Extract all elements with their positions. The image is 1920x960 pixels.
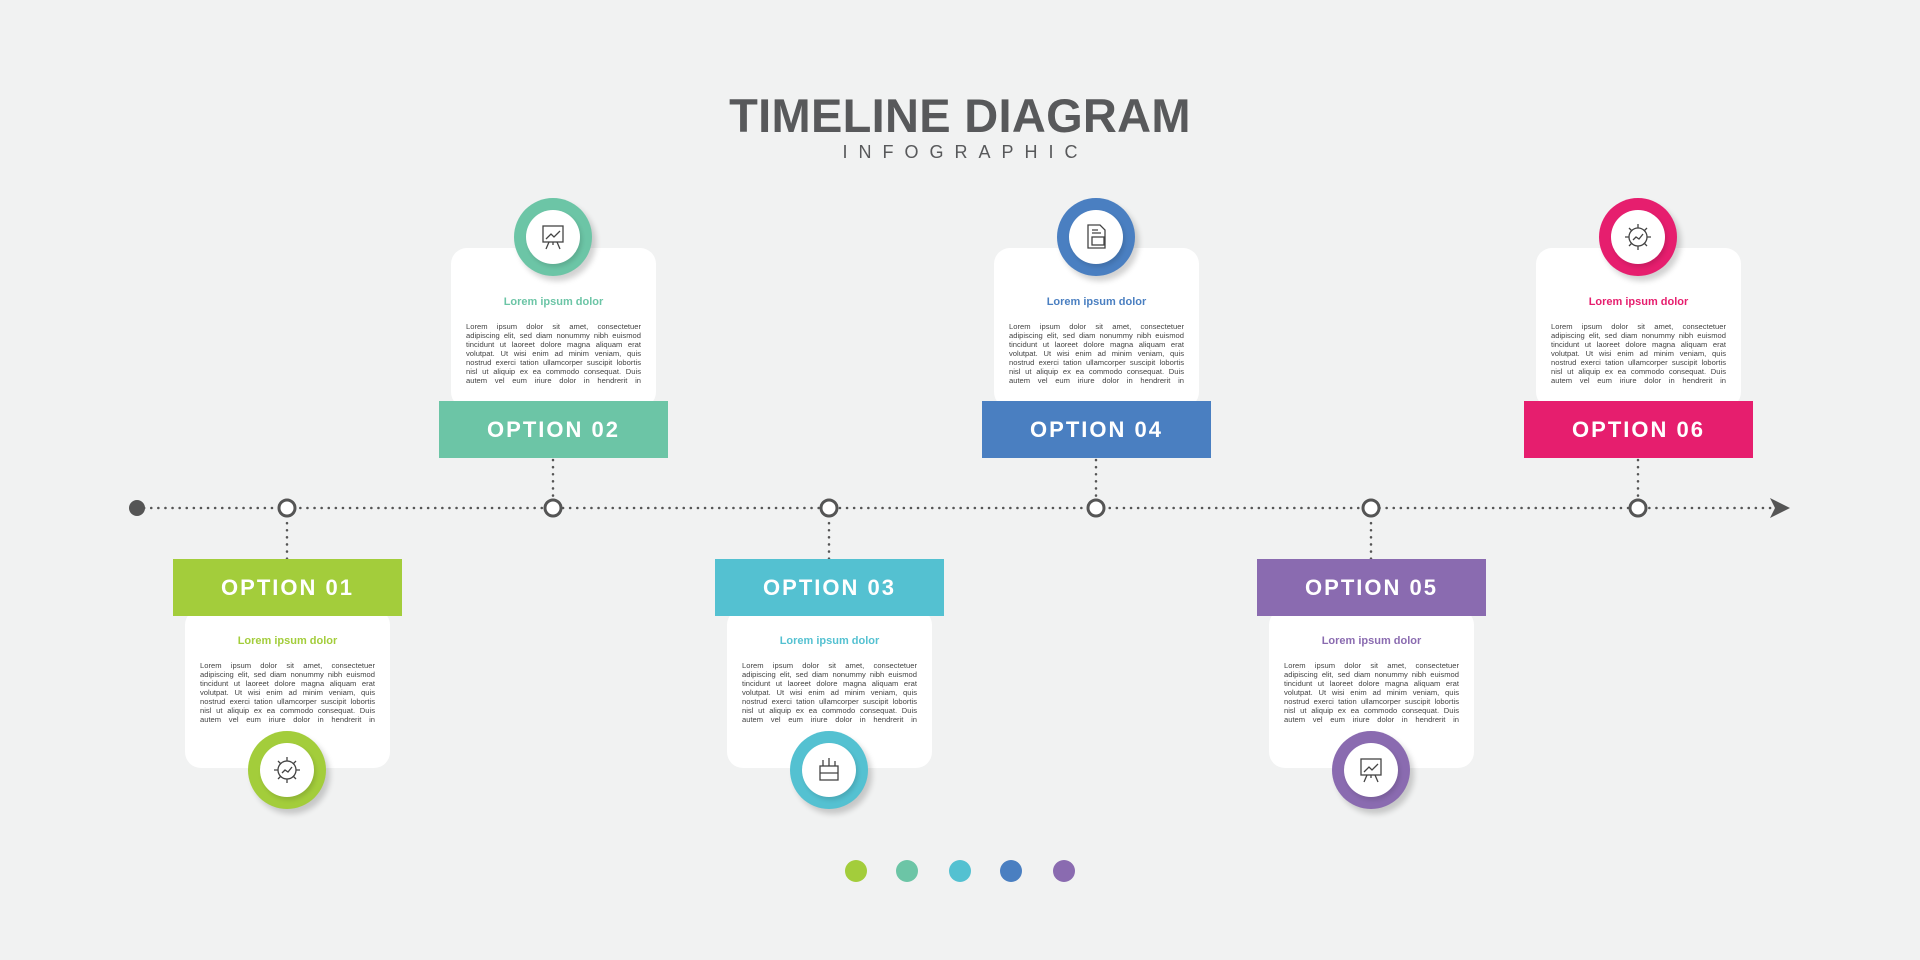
panel: option 04: Lorem ipsum dolor sit amet, consectetuer [1009,322,1184,331]
panel: option 02: Lorem ipsum dolor sit amet, consectetuer [466,322,641,331]
panel: option 01: Lorem ipsum dolor sit amet, consectetuer [200,661,375,670]
subtitle: INFOGRAPHIC [842,142,1088,162]
panel: option 06: autem vel eum iriure dolor in hendrerit in [1551,376,1726,385]
panel: option 06: tincidunt ut laoreet dolore magna aliquam erat [1551,340,1726,349]
panel: option 05 [1257,559,1486,816]
panel: option 06: Lorem ipsum dolor sit amet, consectetuer [1551,322,1726,331]
panel: option 04: autem vel eum iriure dolor in hendrerit in [1009,376,1184,385]
panel: option 05: OPTION 05 [1305,575,1438,600]
panel: option 05: volutpat. Ut wisi enim ad minim veniam, quis [1284,688,1459,697]
panel: option 05: tincidunt ut laoreet dolore magna aliquam erat [1284,679,1459,688]
panel: option 02: tincidunt ut laoreet dolore magna aliquam erat [466,340,641,349]
panel: option 04: tincidunt ut laoreet dolore magna aliquam erat [1009,340,1184,349]
panel: option 03: adipiscing elit, sed diam nonummy nibh euismod [742,670,917,679]
panel: option 01: Lorem ipsum dolor [238,635,337,647]
legend dots [845,860,1075,882]
panel: option 02: nostrud exerci tation ullamcorper suscipit lobortis [466,358,641,367]
panel: option 02: volutpat. Ut wisi enim ad minim veniam, quis [466,349,641,358]
panel: option 04: OPTION 04 [1030,417,1163,442]
panel: option 03: volutpat. Ut wisi enim ad minim veniam, quis [742,688,917,697]
panel: option 04: nostrud exerci tation ullamcorper suscipit lobortis [1009,358,1184,367]
panel: option 03: OPTION 03 [763,575,896,600]
panel: option 05: nisl ut aliquip ex ea commodo consequat. Duis [1284,706,1459,715]
panel: option 04: nisl ut aliquip ex ea commodo consequat. Duis [1009,367,1184,376]
panel: option 01: volutpat. Ut wisi enim ad minim veniam, quis [200,688,375,697]
panel: option 06: nostrud exerci tation ullamcorper suscipit lobortis [1551,358,1726,367]
panel: option 01 [173,559,402,816]
panel: option 03: autem vel eum iriure dolor in hendrerit in [742,715,917,724]
panel: option 01: nostrud exerci tation ullamcorper suscipit lobortis [200,697,375,706]
panel: option 06: OPTION 06 [1572,417,1705,442]
panel: option 04: Lorem ipsum dolor [1047,296,1146,308]
panel: option 05: nostrud exerci tation ullamcorper suscipit lobortis [1284,697,1459,706]
panel: option 06 [1524,198,1753,458]
panel: option 01: tincidunt ut laoreet dolore magna aliquam erat [200,679,375,688]
panel: option 03: Lorem ipsum dolor [780,635,879,647]
panel: option 03: Lorem ipsum dolor sit amet, consectetuer [742,661,917,670]
panel: option 03: nostrud exerci tation ullamcorper suscipit lobortis [742,697,917,706]
panel: option 06: Lorem ipsum dolor [1589,296,1688,308]
panel: option 01: adipiscing elit, sed diam nonummy nibh euismod [200,670,375,679]
panel: option 02: OPTION 02 [487,417,620,442]
title: TIMELINE DIAGRAM [729,89,1191,142]
panel: option 02: Lorem ipsum dolor [504,296,603,308]
panel: option 06: nisl ut aliquip ex ea commodo consequat. Duis [1551,367,1726,376]
panel: option 06: volutpat. Ut wisi enim ad minim veniam, quis [1551,349,1726,358]
panel: option 06: adipiscing elit, sed diam nonummy nibh euismod [1551,331,1726,340]
panel: option 05: Lorem ipsum dolor [1322,635,1421,647]
panel: option 05: Lorem ipsum dolor sit amet, consectetuer [1284,661,1459,670]
panel: option 04: volutpat. Ut wisi enim ad minim veniam, quis [1009,349,1184,358]
panel: option 02 [439,198,668,458]
panel: option 05: adipiscing elit, sed diam nonummy nibh euismod [1284,670,1459,679]
panel: option 01: autem vel eum iriure dolor in hendrerit in [200,715,375,724]
panel: option 02: autem vel eum iriure dolor in hendrerit in [466,376,641,385]
panel: option 03 [715,559,944,816]
panel: option 03: tincidunt ut laoreet dolore magna aliquam erat [742,679,917,688]
panel: option 01: nisl ut aliquip ex ea commodo consequat. Duis [200,706,375,715]
panel: option 05: autem vel eum iriure dolor in hendrerit in [1284,715,1459,724]
panel: option 03: nisl ut aliquip ex ea commodo consequat. Duis [742,706,917,715]
panel: option 01: OPTION 01 [221,575,354,600]
panel: option 02: nisl ut aliquip ex ea commodo consequat. Duis [466,367,641,376]
panel: option 02: adipiscing elit, sed diam nonummy nibh euismod [466,331,641,340]
panel: option 04 [982,198,1211,458]
panel: option 04: adipiscing elit, sed diam nonummy nibh euismod [1009,331,1184,340]
